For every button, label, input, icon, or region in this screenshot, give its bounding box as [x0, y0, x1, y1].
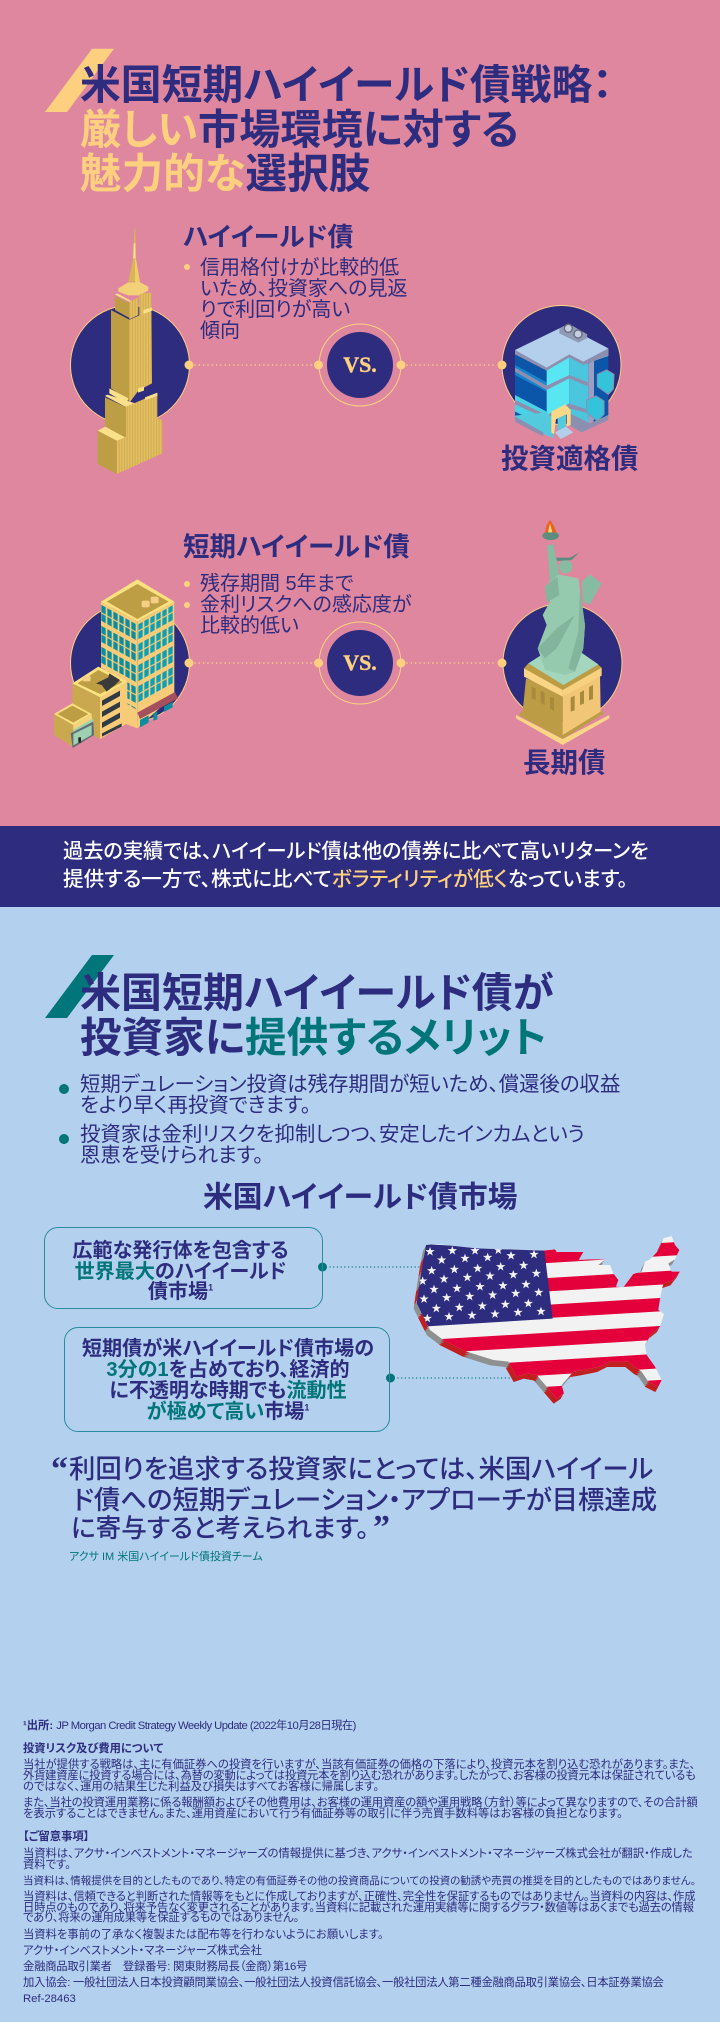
callout: one third: が極めて高い市場1: [147, 1401, 309, 1423]
panel: benefits accent slash: [45, 955, 114, 1018]
connector row 1: VS.: [343, 352, 377, 377]
footnotes: Ref-28463: [23, 1993, 76, 2005]
heading: high yield bonds: ハイイールド債: [183, 222, 353, 252]
footnotes: を表示することはできません。また、運用資産において行う有価証券等の取引に伴う売買手数料等はお客様の負担となります。: [23, 1808, 623, 1820]
text: short-term description: 比較的低い: [200, 615, 299, 637]
map: USA flag: [414, 1236, 680, 1404]
benefits title: 米国短期ハイイールド債が: [80, 970, 554, 1016]
text: high yield description: 信用格付けが比較的低: [200, 257, 399, 279]
icon: skyscraper: [98, 228, 162, 474]
bullet dot: [184, 264, 190, 270]
connector row 1: [70, 305, 622, 425]
footnotes: アクサ・インベストメント・マネージャーズ株式会社: [23, 1945, 262, 1957]
footnotes: 【ご留意事項】: [23, 1831, 89, 1843]
quote: に寄与すると考えられます。: [71, 1515, 369, 1543]
footnotes: [23, 1719, 698, 2005]
title: 米国短期ハイイールド債戦略：: [80, 62, 613, 108]
title: 厳しい市場環境に対する: [80, 107, 519, 153]
callout: largest market: 広範な発行体を包含する: [72, 1240, 289, 1262]
callout: one third: 短期債が米ハイイールド債市場の: [82, 1338, 374, 1360]
connector row 2: [70, 604, 622, 723]
footnotes: であり、将来の運用成果等を保証するものではありません。: [23, 1912, 299, 1924]
opening quote mark: “: [51, 1451, 68, 1488]
title: [80, 62, 613, 197]
bullet dots: [184, 581, 190, 608]
footnotes: 金融商品取引業者 登録番号: 関東財務局長（金商）第16号: [23, 1961, 307, 1973]
bullet list: をより早く再投資できます。: [80, 1095, 311, 1117]
footnotes: 当資料は、アクサ・インベストメント・マネージャーズの情報提供に基づき、アクサ・インベストメント・マネージャーズ株式会社が翻訳・作成した: [23, 1848, 693, 1860]
icon: office buildings: [54, 579, 178, 748]
panel: pink top section: [0, 0, 720, 826]
footnotes: 投資リスク及び費用について: [23, 1743, 163, 1755]
quote: [51, 1451, 657, 1546]
footnotes: 外貨建資産に投資する場合には、為替の変動によっては投資元本を割り込む恐れがあります。したがって、お客様の投資元本は保証されているも: [23, 1770, 696, 1782]
callout: one third: [64, 1327, 390, 1432]
footnotes: 当資料は、信頼できると判断された情報等をもとに作成しておりますが、正確性、完全性を保証するものではありません。当資料の内容は、作成: [23, 1891, 696, 1903]
text: short-term description: 金利リスクへの感応度が: [200, 594, 411, 616]
text: short-term description: [200, 572, 412, 637]
connector row 2: VS.: [343, 650, 377, 675]
text: high yield description: りで利回りが高い: [200, 299, 350, 321]
callout: one third: 3分の1を占めており、経済的: [106, 1359, 350, 1381]
closing quote mark: ”: [373, 1509, 390, 1546]
footnotes: ¹出所: JP Morgan Credit Strategy Weekly Update (2022年10月28日現在): [23, 1720, 356, 1732]
heading: short-term high yield bonds: 短期ハイイールド債: [183, 532, 410, 562]
quote attribution: アクサ IM 米国ハイイールド債投資チーム: [69, 1550, 263, 1562]
quote: 利回りを追求する投資家にとっては、米国ハイイール: [69, 1454, 653, 1484]
footnotes: のではなく、運用の結果生じた利益及び損失はすべてお客様に帰属します。: [23, 1781, 379, 1793]
footnotes: 資料です。: [23, 1859, 71, 1871]
footnotes: 当社が提供する戦略は、主に有価証券への投資を行いますが、当該有価証券の価格の下落により、投資元本を割り込む恐れがあります。また、: [23, 1759, 695, 1771]
callout: largest market: 債市場1: [148, 1281, 213, 1303]
label: long-term bonds: 長期債: [523, 747, 606, 778]
banner: navy statement: 過去の実績では、ハイイールド債は他の債券に比べて高いリターンを: [63, 841, 649, 863]
label: investment grade bonds: 投資適格債: [501, 443, 638, 474]
bullet list: 投資家は金利リスクを抑制しつつ、安定したインカムという: [80, 1124, 585, 1146]
text: high yield description: 傾向: [200, 320, 240, 342]
banner: navy statement: [0, 826, 720, 907]
footnotes: また、当社の投資運用業務に係る報酬額およびその他費用は、お客様の運用資産の額や運用戦略（方針）等によって異なりますので、その合計額: [23, 1797, 698, 1809]
text: high yield description: いため、投資家への見返: [200, 278, 407, 300]
benefits title: [80, 970, 554, 1061]
footnotes: 加入協会: 一般社団法人日本投資顧問業協会、一般社団法人投資信託協会、一般社団法人第二種金融商品取引業協会、日本証券業協会: [23, 1977, 664, 1989]
callout: one third: に不透明な時期でも流動性: [109, 1380, 347, 1402]
footnotes: 当資料は、情報提供を目的としたものであり、特定の有価証券その他の投資商品についての投資の勧誘や売買の推奨を目的としたものではありません。: [23, 1875, 696, 1887]
title: 魅力的な選択肢: [80, 150, 370, 197]
callout: largest market: [44, 1227, 323, 1309]
icon: statue of liberty: [516, 520, 610, 745]
footnotes: 当資料を事前の了承なく複製または配布等を行わないようにお願いします。: [23, 1929, 383, 1941]
footnotes: 日時点のものであり、将来予告なく変更されることがあります。当資料に記載された運用実績等に関するグラフ・数値等はあくまでも過去の情報: [23, 1902, 694, 1914]
quote: ド債への短期デュレーション・アプローチが目標達成: [73, 1485, 657, 1515]
connectors: [318, 1262, 510, 1382]
bullet list: [59, 1073, 620, 1167]
banner: navy statement: 提供する一方で、株式に比べてボラティリティが低くなっています。: [63, 868, 628, 891]
icon: glass office building: [515, 323, 614, 439]
text: high yield description: [200, 257, 407, 342]
heading: US high yield market: 米国ハイイールド債市場: [203, 1181, 518, 1214]
text: short-term description: 残存期間 5年まで: [200, 573, 354, 595]
callout: largest market: 世界最大のハイイールド: [75, 1261, 286, 1283]
bullet list: 恩恵を受けられます。: [80, 1145, 263, 1167]
title accent slash: [45, 48, 114, 112]
benefits title: 投資家に提供するメリット: [80, 1014, 547, 1061]
bullet list: 短期デュレーション投資は残存期間が短いため、償還後の収益: [80, 1074, 620, 1096]
